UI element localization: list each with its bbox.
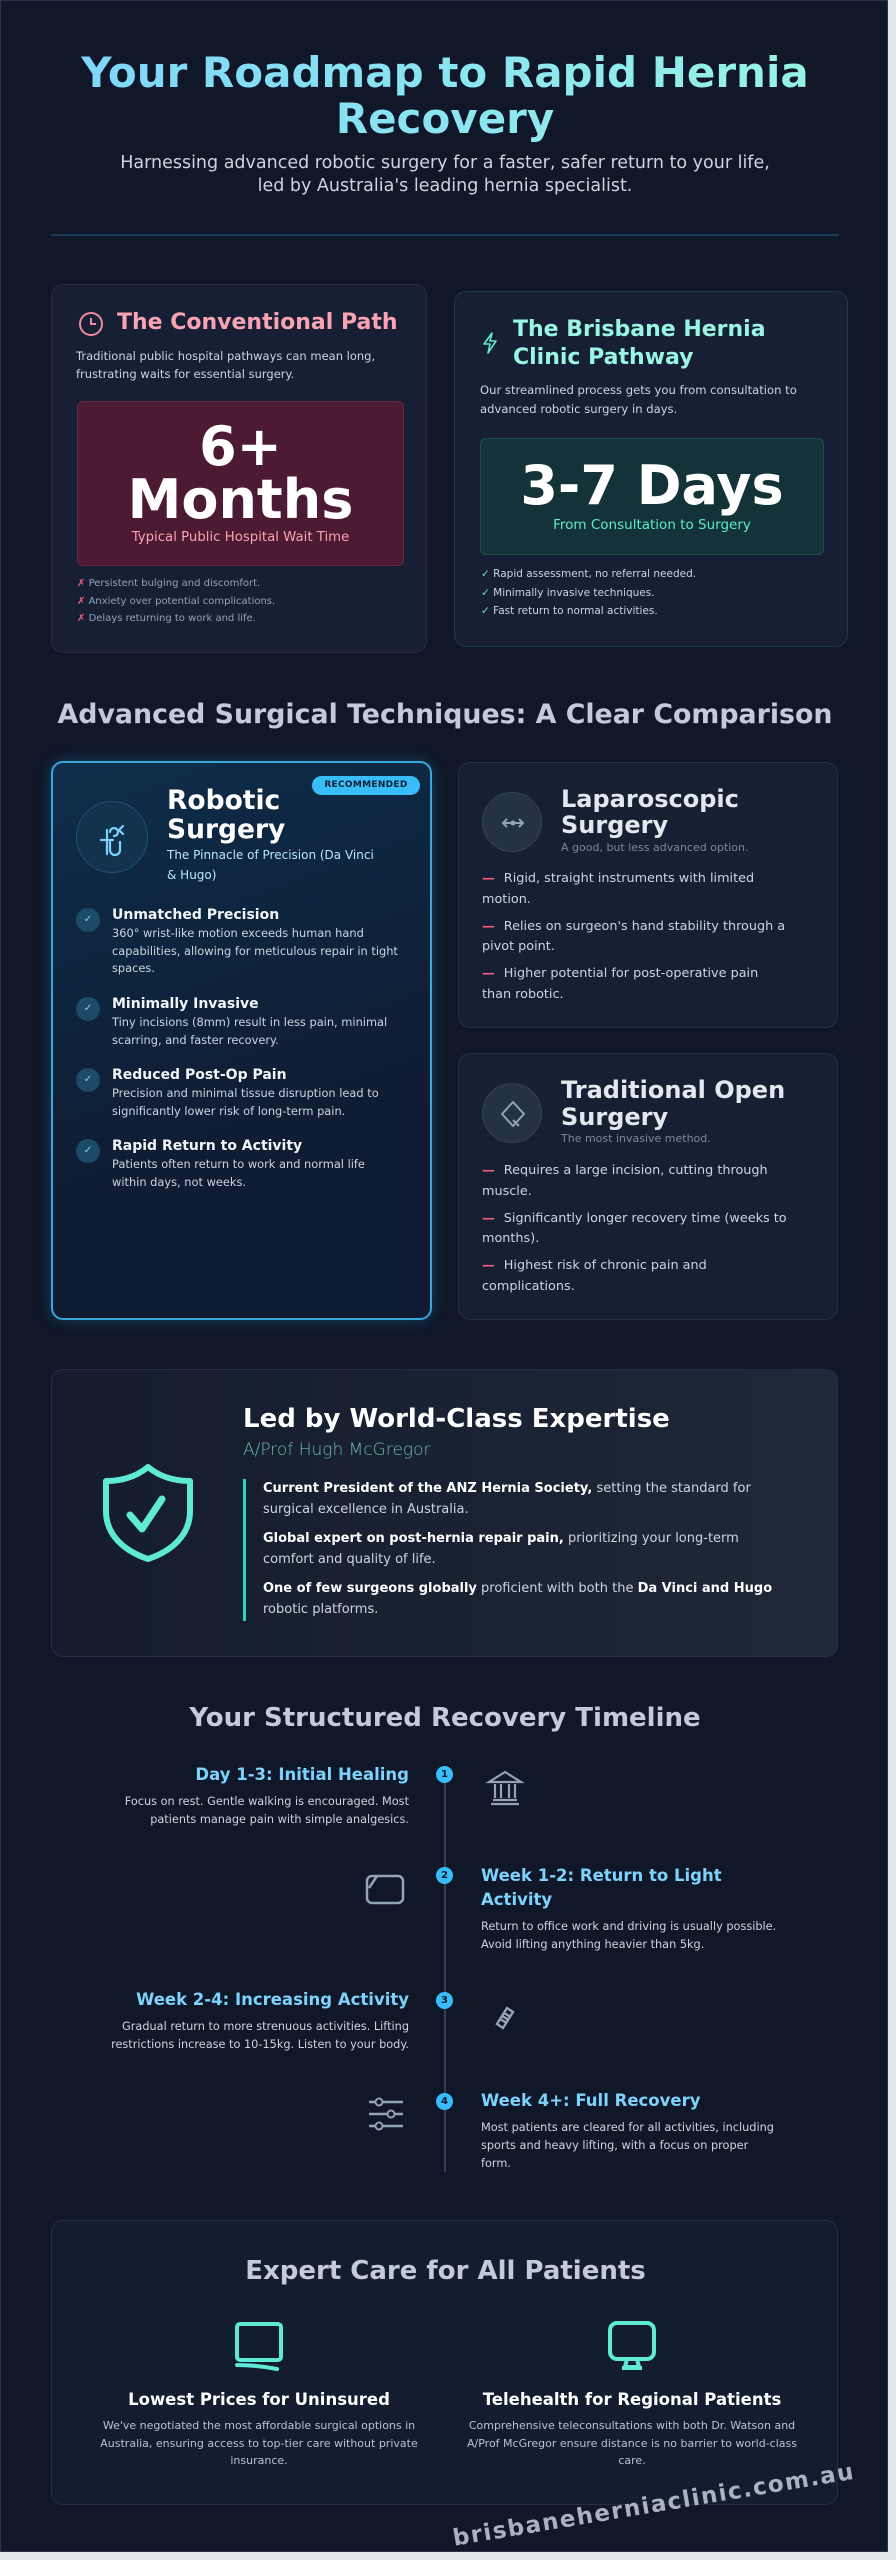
list: laparoscopic cons <box>482 871 785 1002</box>
step 2: 2 <box>441 1870 448 1881</box>
step 4 <box>369 2091 774 2170</box>
column: telehealth: Telehealth for Regional Patients <box>483 2390 781 2409</box>
text: robotic subtitle <box>166 848 374 882</box>
list: benefits: ✓ Minimally invasive techniques. <box>481 586 655 598</box>
text: robotic subtitle: The Pinnacle of Precision (Da Vinci <box>167 848 374 862</box>
step 3: Gradual return to more strenuous activities. Lifting restrictions increase to 10-15kg. Listen to your body. <box>111 2020 409 2051</box>
step 1: 1 <box>441 1769 448 1780</box>
stat: 6+ months: Months <box>128 468 353 531</box>
column: telehealth: Comprehensive teleconsultations with both Dr. Watson and A/Prof McGregor ensure distance is no barrier to world-class care. <box>467 2419 797 2467</box>
subtitle <box>120 153 770 196</box>
heading: robotic: Robotic <box>167 785 280 816</box>
heading: laparoscopic: Laparoscopic <box>561 785 739 813</box>
badge: recommended <box>312 776 420 795</box>
list: laparoscopic cons: — Rigid, straight instruments with limited motion. <box>482 871 754 906</box>
text: credentials: comfort and quality of life. <box>263 1552 436 1566</box>
step 3 <box>111 1990 515 2051</box>
heading: robotic: Surgery <box>167 814 285 845</box>
item: reduced pain: Reduced Post-Op Pain <box>112 1067 287 1083</box>
panel: robotic surgery: ✓ <box>84 914 92 925</box>
text: open subtitle: The most invasive method. <box>561 1132 711 1145</box>
panel: robotic surgery: ✓ <box>84 1003 92 1014</box>
heading: robotic <box>167 785 285 845</box>
icon: hand <box>495 2006 515 2030</box>
step 2: Return to office work and driving is usually possible. Avoid lifting anything heavier than 5kg. <box>481 1920 776 1951</box>
heading: brisbane: The Brisbane Hernia <box>513 317 766 342</box>
icon: sliders <box>369 2098 403 2130</box>
list: drawbacks: ✗ Delays returning to work and life. <box>77 613 256 624</box>
panel: expertise <box>51 1369 838 1657</box>
text: brisbane desc: Our streamlined process gets you from consultation to advanced robotic surgery in days. <box>480 383 797 416</box>
timeline <box>111 1765 776 2172</box>
panel: laparoscopic <box>458 762 838 1028</box>
item: minimally invasive: Minimally Invasive <box>112 996 259 1012</box>
panel: robotic surgery: ✓ <box>84 1074 92 1085</box>
column: telehealth <box>467 2321 797 2467</box>
panel: expert care <box>51 2220 838 2505</box>
item: precision: Unmatched Precision <box>112 907 279 923</box>
watermark: brisbaneherniaclinic.com.au <box>451 2459 857 2552</box>
heading: open surgery: Surgery <box>561 1103 668 1131</box>
heading: brisbane: Clinic Pathway <box>513 345 694 370</box>
heading: conventional: The Conventional Path <box>117 310 398 335</box>
step 3: 3 <box>441 1995 448 2006</box>
list: open cons <box>482 1163 787 1294</box>
item: minimally invasive: Tiny incisions (8mm) result in less pain, minimal scarring, and faster recovery. <box>112 1015 387 1046</box>
list: laparoscopic cons: — Relies on surgeon's hand stability through a pivot point. <box>482 918 785 954</box>
item: rapid return: Patients often return to work and normal life within days, not weeks. <box>112 1157 365 1188</box>
icon: monitor <box>608 2321 656 2370</box>
stat: 6+ months: Typical Public Hospital Wait Time <box>132 530 349 545</box>
heading: timeline: Your Structured Recovery Timeline <box>189 1703 701 1733</box>
title: Your Roadmap to Rapid Hernia <box>81 48 809 97</box>
item: precision: 360° wrist-like motion exceeds human hand capabilities, allowing for meticulous repair in tight spaces. <box>112 926 398 975</box>
stat: 3-7 days: 3-7 Days <box>520 454 784 517</box>
panel: open surgery <box>458 1053 838 1320</box>
icon: open surgery <box>482 1083 542 1143</box>
text: robotic subtitle: & Hugo) <box>167 868 216 882</box>
subtitle: Harnessing advanced robotic surgery for a faster, safer return to your life, <box>120 153 770 173</box>
text: credentials <box>263 1481 772 1616</box>
stat: 6+ months: 6+ <box>199 415 282 478</box>
step 1: Day 1-3: Initial Healing <box>195 1765 409 1784</box>
step 4: form. <box>481 2157 511 2170</box>
text: credentials: One of few surgeons globally proficient with both the Da Vinci and Hugo robotic platforms. <box>263 1581 772 1616</box>
text: credentials: Global expert on post-hernia repair pain, prioritizing your long-term <box>263 1531 739 1546</box>
list: open cons: — Highest risk of chronic pain and complications. <box>482 1258 707 1294</box>
step 4: Most patients are cleared for all activities, including sports and heavy lifting, with a focus on proper <box>481 2121 774 2152</box>
icon: building <box>485 1770 525 1806</box>
item: reduced pain: Precision and minimal tissue disruption lead to significantly lower risk of long-term pain. <box>112 1086 379 1118</box>
icon: device <box>235 2322 283 2371</box>
subtitle: led by Australia's leading hernia specialist. <box>258 176 632 196</box>
stat: 3-7 days: From Consultation to Surgery <box>553 517 751 533</box>
title: Recovery <box>336 94 554 143</box>
step 2 <box>366 1866 776 1951</box>
icon: clock <box>79 312 103 336</box>
step 2: Activity <box>481 1890 552 1909</box>
column: lowest prices <box>100 2322 418 2467</box>
icon: laparoscopic <box>482 792 542 852</box>
list: benefits: ✓ Rapid assessment, no referral needed. <box>481 568 696 580</box>
heading: open surgery: Traditional Open <box>561 1076 785 1104</box>
list: laparoscopic cons: — Higher potential for post-operative pain than robotic. <box>482 966 758 1002</box>
panel: robotic surgery <box>51 761 432 1320</box>
heading: brisbane <box>513 317 766 370</box>
text: name: A/Prof Hugh McGregor <box>243 1440 431 1460</box>
list: drawbacks <box>77 578 275 624</box>
step 2: Week 1-2: Return to Light <box>481 1866 722 1885</box>
badge: recommended: RECOMMENDED <box>324 780 408 790</box>
stat: 3-7 days <box>480 438 824 555</box>
step 1: Focus on rest. Gentle walking is encouraged. Most patients manage pain with simple analgesics. <box>125 1795 409 1826</box>
item: rapid return: Rapid Return to Activity <box>112 1138 302 1154</box>
list: open cons: — Significantly longer recovery time (weeks to months). <box>482 1210 787 1246</box>
step 4: 4 <box>441 2096 448 2107</box>
heading: laparoscopic <box>561 785 739 839</box>
heading: expertise: Led by World-Class Expertise <box>243 1404 670 1434</box>
column: lowest prices: We've negotiated the most affordable surgical options in Australia, ensuring access to top-tier care without private insurance. <box>100 2419 418 2467</box>
item: minimally invasive <box>76 996 387 1046</box>
list: open cons: — Requires a large incision, cutting through muscle. <box>482 1163 768 1198</box>
column: lowest prices: Lowest Prices for Uninsured <box>128 2390 390 2409</box>
list: benefits <box>481 568 696 617</box>
item: rapid return <box>76 1138 365 1188</box>
heading: laparoscopic: Surgery <box>561 811 668 839</box>
icon: lightning <box>483 332 497 354</box>
title <box>1 50 889 142</box>
heading: open surgery <box>561 1076 785 1131</box>
text: credentials: Current President of the ANZ Hernia Society, setting the standard for surgical excellence in Australia. <box>263 1481 751 1516</box>
text: conventional desc: Traditional public hospital pathways can mean long, frustrating waits for essential surgery. <box>76 349 375 381</box>
icon: screen <box>366 1874 404 1904</box>
heading: expert care: Expert Care for All Patients <box>245 2256 646 2286</box>
list: benefits: ✓ Fast return to normal activities. <box>481 605 658 617</box>
stat: 6+ months <box>77 401 404 566</box>
list: drawbacks: ✗ Anxiety over potential complications. <box>77 596 275 606</box>
step 3: Week 2-4: Increasing Activity <box>136 1990 409 2009</box>
panel: robotic surgery: ✓ <box>84 1145 92 1156</box>
step 4: Week 4+: Full Recovery <box>481 2091 700 2110</box>
icon: robotic <box>76 801 148 873</box>
heading: comparison: Advanced Surgical Techniques: A Clear Comparison <box>58 699 832 730</box>
panel: brisbane pathway <box>454 291 848 647</box>
panel: conventional path <box>51 284 427 653</box>
step 1 <box>125 1765 525 1826</box>
icon: shield <box>103 1464 193 1562</box>
text: laparoscopic subtitle: A good, but less advanced option. <box>561 841 749 854</box>
item: reduced pain <box>76 1067 379 1118</box>
item: precision <box>76 907 398 975</box>
list: drawbacks: ✗ Persistent bulging and discomfort. <box>77 578 260 589</box>
